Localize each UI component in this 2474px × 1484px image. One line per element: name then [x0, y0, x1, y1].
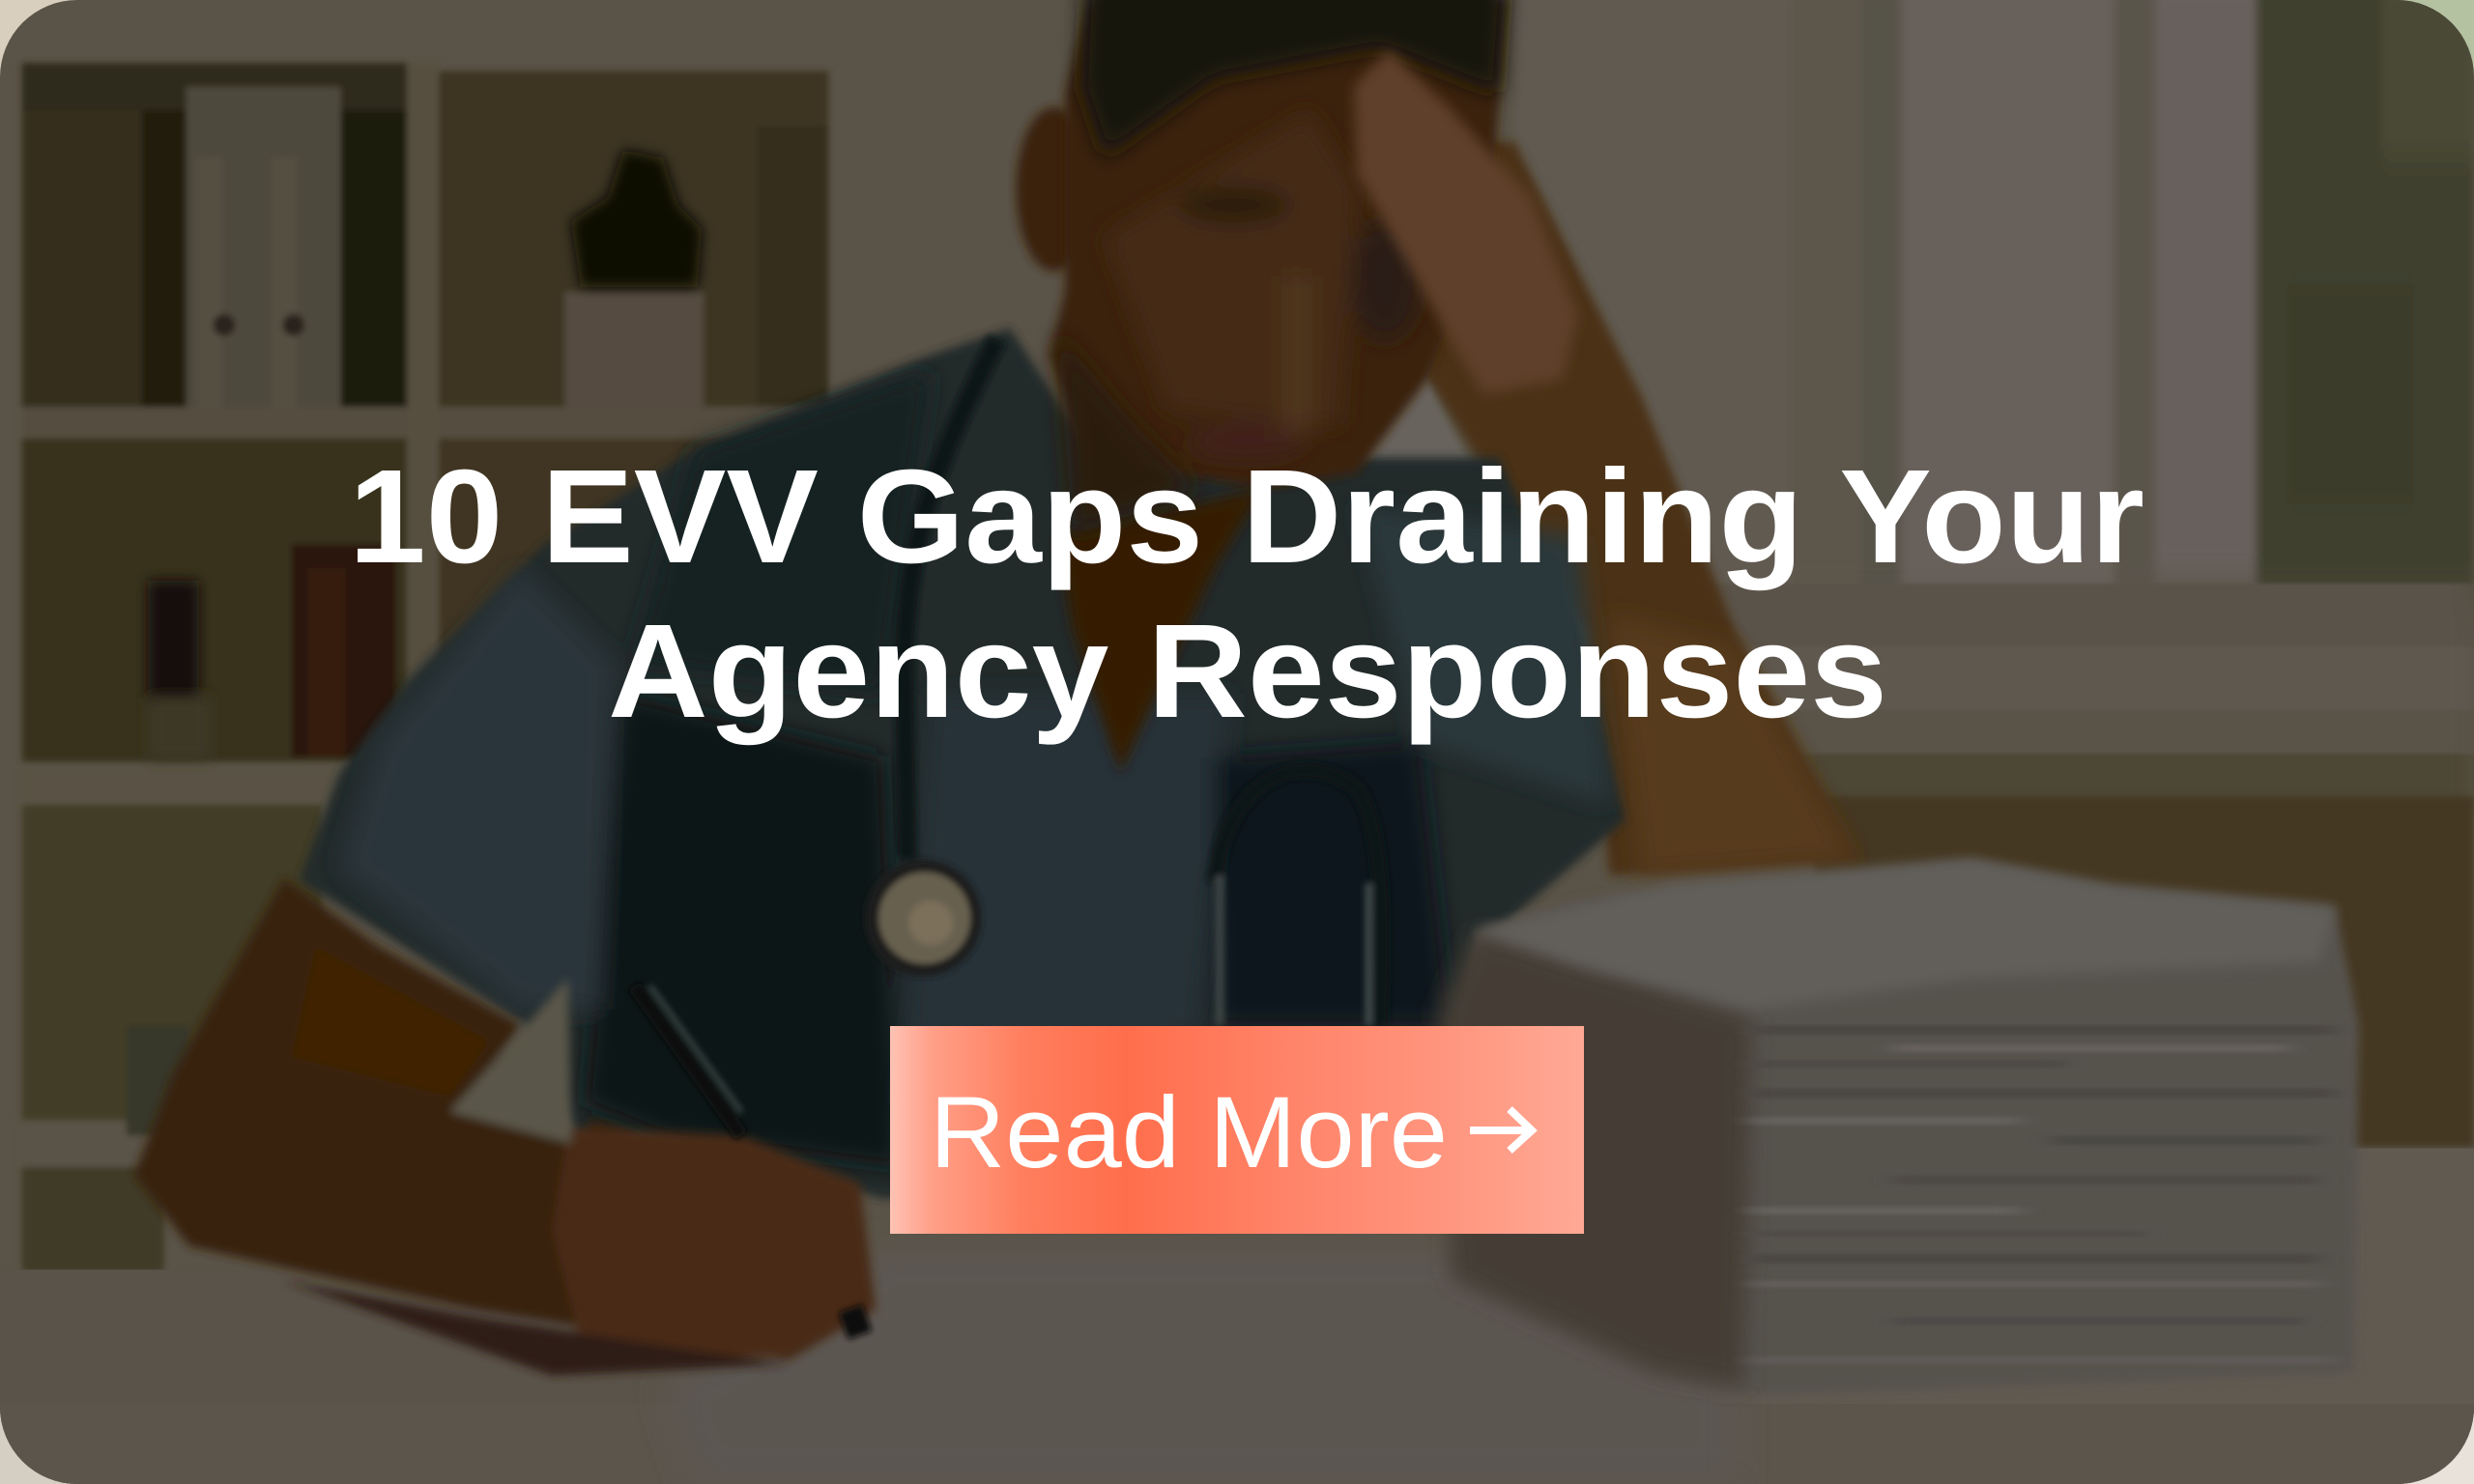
title: Agency Responses	[608, 597, 1887, 746]
ear	[1011, 102, 1070, 276]
left arm and writing hand	[134, 878, 876, 1376]
window sill	[1730, 584, 2474, 796]
button label: Read More	[930, 1076, 1448, 1189]
window wall	[1514, 0, 2474, 631]
title	[349, 442, 2144, 746]
shelf vase	[148, 581, 210, 760]
paper stack	[1439, 860, 2359, 1396]
hand on forehead	[1354, 50, 1578, 394]
pen	[634, 985, 872, 1339]
wall gap between head and arm	[1371, 381, 1465, 459]
table	[0, 1149, 2474, 1484]
stethoscope	[865, 339, 1381, 1025]
forearm raised to forehead	[1420, 142, 1862, 875]
bookshelf	[22, 63, 843, 1271]
sofa	[1815, 796, 2474, 1147]
scrub top	[300, 328, 1625, 1199]
plant	[571, 150, 703, 287]
title: 10 EVV Gaps Draining Your	[349, 442, 2144, 591]
read more button	[890, 1026, 1584, 1234]
icon: right arrow	[1470, 1109, 1532, 1151]
face and neck	[1050, 0, 1507, 489]
